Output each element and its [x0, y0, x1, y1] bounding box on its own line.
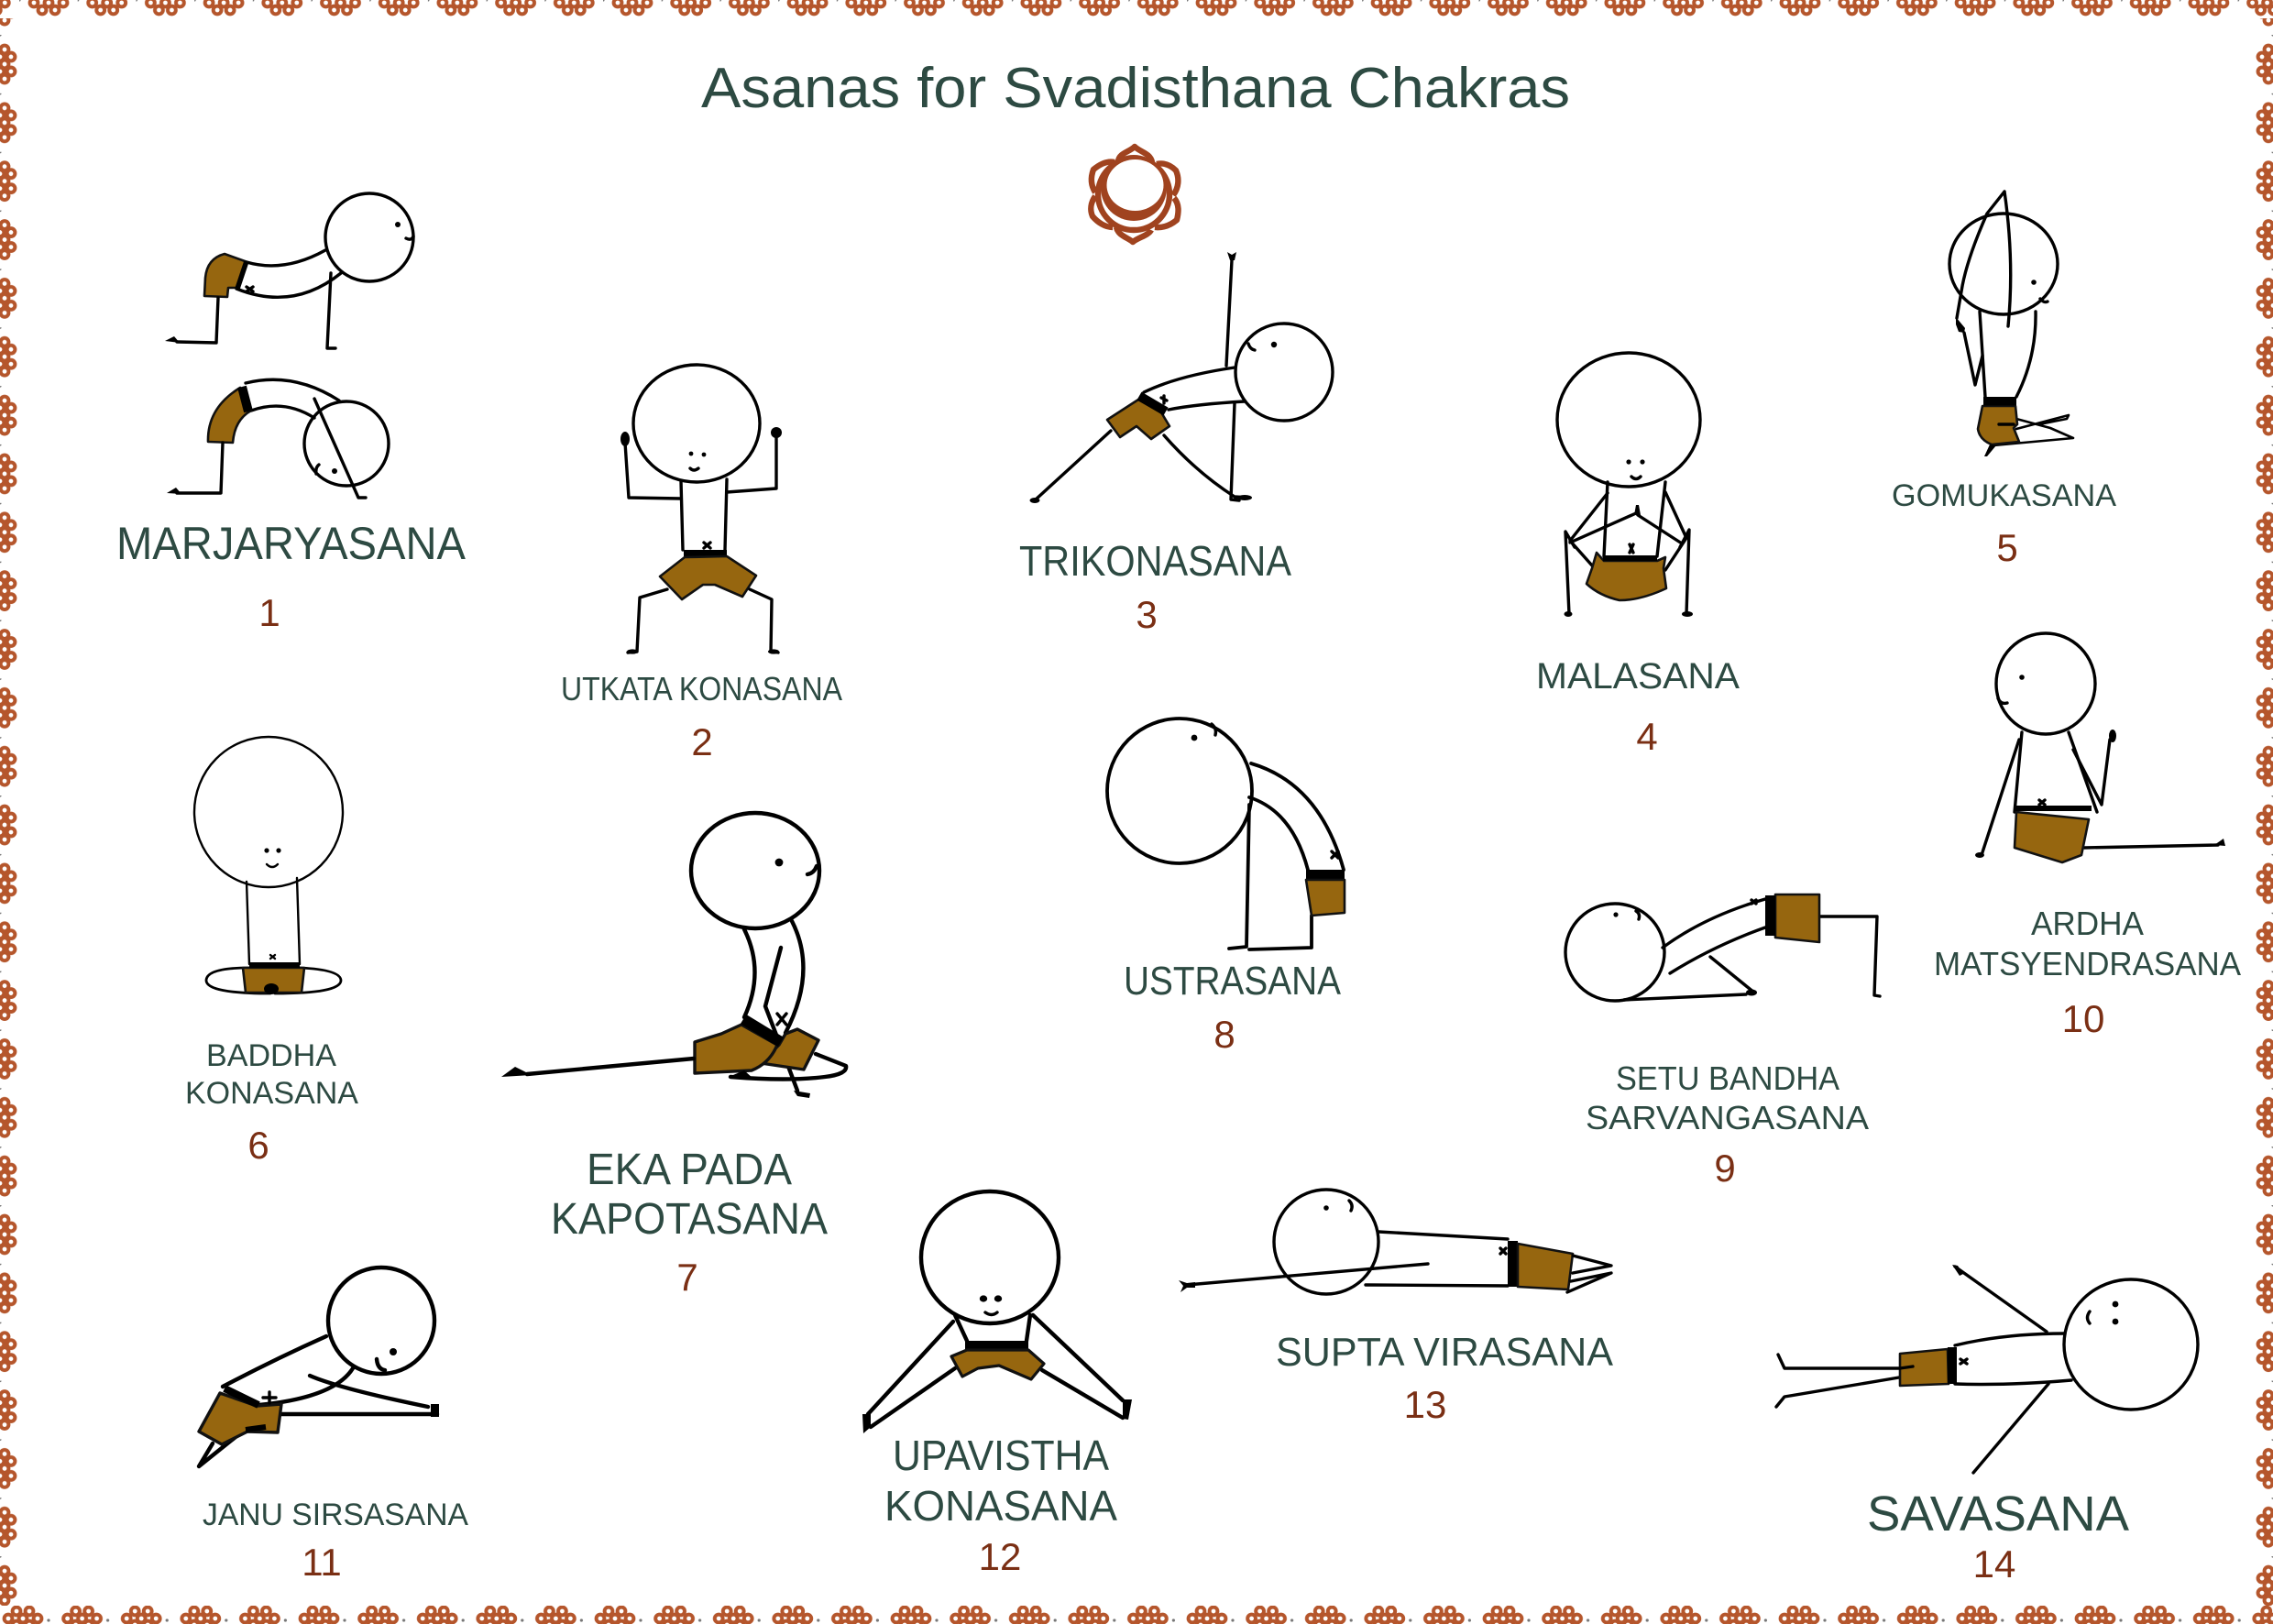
- name: [185, 1038, 358, 1111]
- name: JANU SIRSASANA: [203, 1498, 468, 1532]
- number: 2: [691, 720, 713, 763]
- name: TRIKONASANA: [1019, 537, 1291, 585]
- icon: svadisthana chakra symbol: [1091, 147, 1179, 242]
- name: SUPTA VIRASANA: [1276, 1330, 1614, 1375]
- pose 10: ardha matsyendrasana: [1934, 633, 2241, 1040]
- number: 10: [2062, 997, 2104, 1040]
- number: 8: [1213, 1013, 1235, 1056]
- figure: camel pose stick figure: [1107, 719, 1345, 949]
- name: EKA PADA: [587, 1146, 792, 1194]
- figure: bound angle stick figure: [194, 737, 343, 994]
- figure: garland pose stick figure: [1557, 353, 1700, 617]
- number: 6: [247, 1124, 269, 1167]
- name: [551, 1146, 828, 1244]
- name: BADDHA: [206, 1038, 336, 1073]
- figure: pigeon pose stick figure: [501, 813, 846, 1098]
- pose 9: setu bandha sarvangasana: [1565, 894, 1880, 1190]
- figure: cat and cow stick figures: [165, 193, 413, 498]
- figure: squatting stick figure: [620, 365, 782, 654]
- number: 3: [1136, 593, 1158, 636]
- pose 7: eka pada kapotasana: [501, 813, 846, 1299]
- name: KONASANA: [884, 1482, 1117, 1530]
- name: UTKATA KONASANA: [561, 670, 842, 708]
- name: SAVASANA: [1867, 1487, 2129, 1542]
- name: MATSYENDRASANA: [1934, 945, 2241, 982]
- name: SETU BANDHA: [1616, 1059, 1839, 1097]
- name: MALASANA: [1536, 656, 1740, 697]
- pose 1: marjaryasana: [116, 193, 467, 634]
- pose 6: baddha konasana: [185, 737, 358, 1167]
- number: 9: [1714, 1147, 1736, 1190]
- number: 1: [258, 591, 280, 634]
- figure: head to knee stick figure: [199, 1267, 439, 1466]
- number: 14: [1973, 1542, 2015, 1586]
- number: 12: [979, 1535, 1021, 1578]
- pose 5: gomukasana: [1892, 192, 2116, 569]
- name: SARVANGASANA: [1586, 1099, 1869, 1136]
- pose 13: supta virasana: [1179, 1190, 1614, 1426]
- number: 13: [1404, 1383, 1446, 1426]
- figure: seated twist stick figure: [1975, 633, 2225, 862]
- name: GOMUKASANA: [1892, 478, 2116, 513]
- pose 3: trikonasana: [1019, 252, 1333, 636]
- number: 7: [676, 1256, 698, 1299]
- pose 14: savasana: [1776, 1265, 2198, 1586]
- pose 4: malasana: [1536, 353, 1740, 758]
- name: [1586, 1059, 1869, 1136]
- name: [1934, 905, 2241, 982]
- number: 11: [302, 1541, 342, 1584]
- pose 11: janu sirsasana: [199, 1267, 468, 1584]
- name: ARDHA: [2031, 905, 2144, 942]
- pose 12: upavistha konasana: [862, 1191, 1132, 1578]
- figure: wide angle seated stick figure: [862, 1191, 1132, 1433]
- pose 8: ustrasana: [1107, 719, 1345, 1056]
- figure: cow face pose stick figure: [1949, 192, 2073, 456]
- figure: triangle pose stick figure: [1030, 252, 1333, 503]
- name: [884, 1432, 1117, 1530]
- name: MARJARYASANA: [116, 518, 467, 569]
- number: 4: [1636, 715, 1658, 758]
- figure: corpse pose stick figure: [1776, 1265, 2198, 1473]
- name: UPAVISTHA: [893, 1432, 1109, 1479]
- name: KONASANA: [185, 1076, 358, 1111]
- title: Asanas for Svadisthana Chakras: [701, 57, 1570, 120]
- number: 5: [1996, 526, 2018, 569]
- figure: bridge pose stick figure: [1565, 894, 1880, 1001]
- name: KAPOTASANA: [551, 1195, 828, 1244]
- pose 2: utkata konasana: [561, 365, 842, 763]
- name: USTRASANA: [1124, 959, 1342, 1004]
- figure: reclined hero stick figure: [1179, 1190, 1611, 1294]
